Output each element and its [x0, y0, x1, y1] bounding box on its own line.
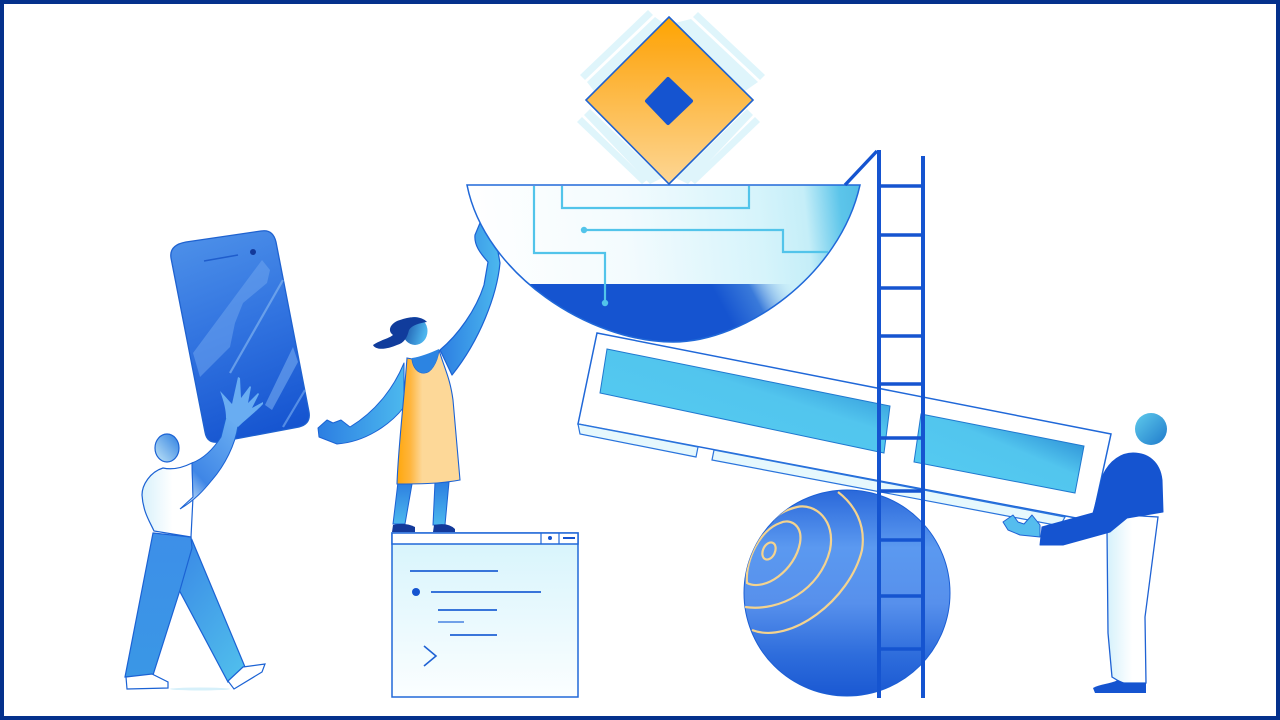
head	[1135, 413, 1167, 445]
head	[155, 434, 179, 462]
head	[402, 317, 428, 345]
trousers	[1107, 515, 1158, 683]
front leg	[125, 533, 192, 677]
hand	[1003, 515, 1040, 537]
back leg	[178, 540, 245, 682]
ground shadow	[170, 688, 230, 690]
shoes	[126, 674, 168, 689]
shoes	[392, 524, 415, 532]
figure: walking person left	[125, 377, 265, 690]
shoe	[1093, 680, 1146, 693]
legs	[393, 482, 412, 524]
left arm	[318, 363, 404, 444]
ball with rings	[744, 490, 950, 696]
dress	[397, 350, 460, 484]
bowl with circuit lines	[467, 151, 877, 344]
hair	[373, 317, 427, 349]
ladder	[879, 150, 923, 698]
raised arm	[440, 223, 500, 375]
figure: man on right	[1003, 413, 1167, 693]
figure: woman in orange dress	[318, 223, 500, 532]
panel: browser window	[392, 533, 578, 697]
torso and arm	[1040, 453, 1163, 545]
icon: phone held by figure	[171, 231, 309, 442]
panel: tilted interface bar	[578, 333, 1111, 526]
hand	[220, 377, 263, 427]
icon: orange diamond with shadows	[577, 10, 765, 184]
shirt	[142, 463, 193, 537]
chest	[412, 349, 439, 373]
arm	[180, 417, 238, 509]
